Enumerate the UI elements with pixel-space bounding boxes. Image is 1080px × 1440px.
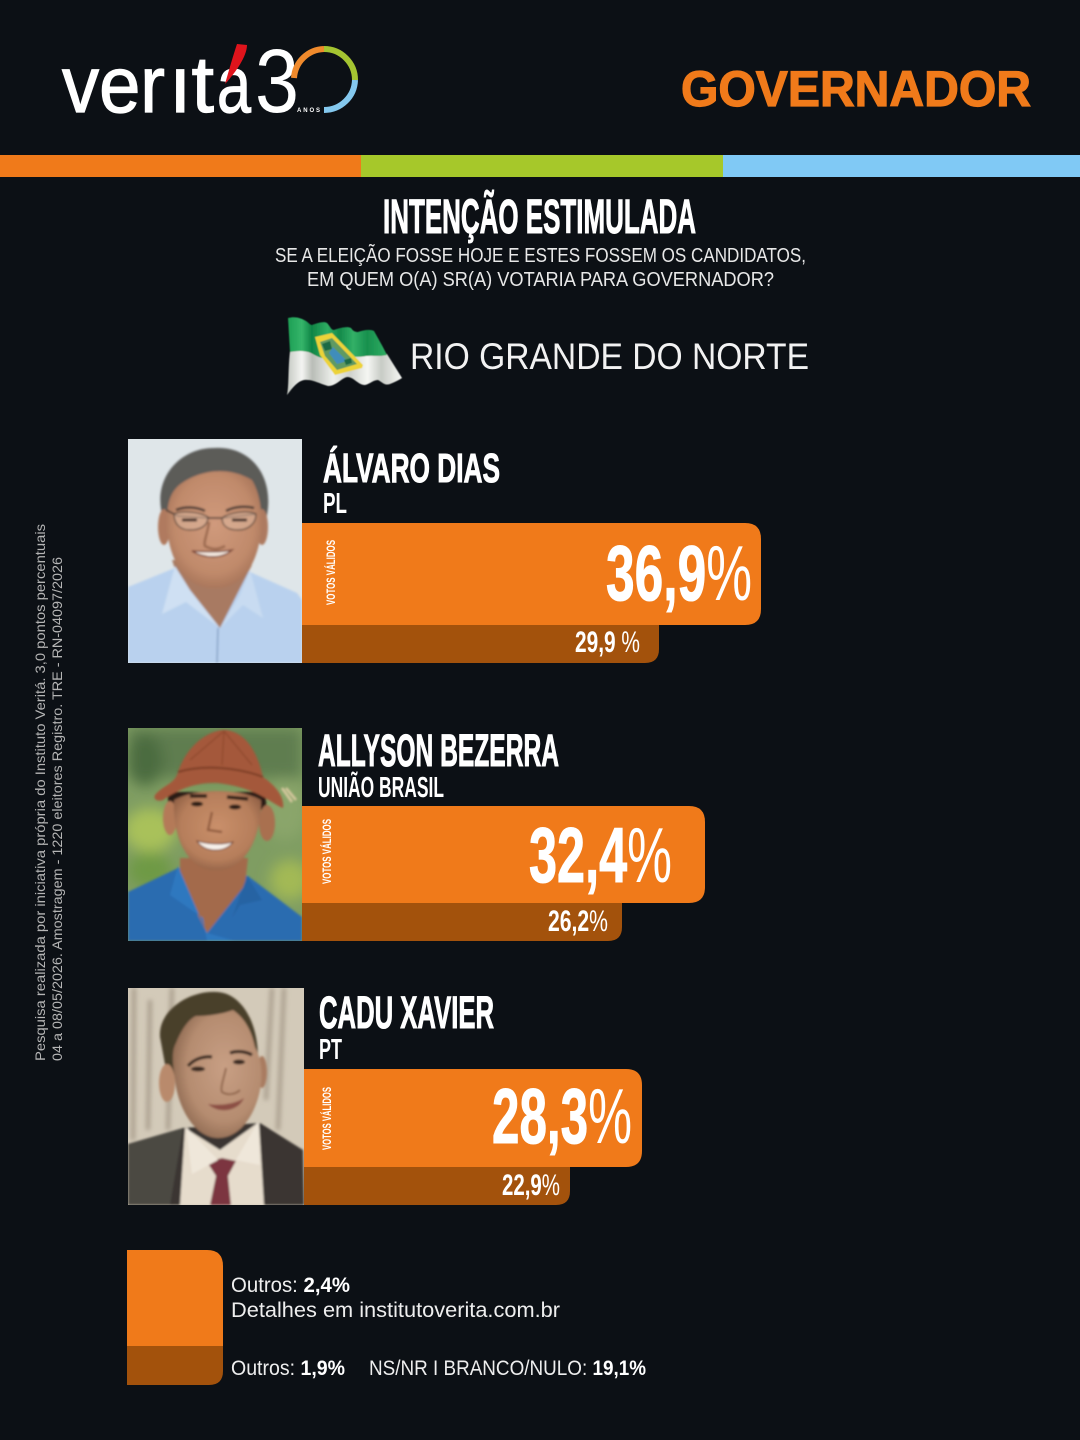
bar: valid votes [302,523,761,625]
value: valid votes: 32,4% [529,811,672,899]
legend text: others total: Outros: 1,9% [231,1357,345,1380]
subtitle question: EM QUEM O(A) SR(A) VOTARIA PARA GOVERNADOR? [307,269,774,291]
panel: candidate Álvaro Dias [128,439,761,663]
candidate name: ALLYSON BEZERRA [318,725,559,776]
bar: total votes [302,903,622,941]
bar: total votes [304,1167,570,1205]
photo: Allyson Bezerra [124,728,310,941]
legend text: details: Detalhes em institutoverita.com.br [231,1299,560,1322]
subtitle question [275,243,806,291]
methodology note: 04 a 08/05/2026. Amostragem - 1220 eleitores Registro. TRE - RN-04097/2026 [49,557,65,1061]
legend swatch: total votes [127,1346,223,1385]
logo: Veritá 30 anos: a [217,40,251,129]
value: total votes: 26,2% [548,905,608,938]
value: valid votes: 36,9% [606,529,752,617]
label: votos válidos: VOTOS VÁLIDOS [319,819,334,884]
value: valid votes: 28,3% [492,1072,632,1160]
value: total votes: 22,9% [502,1169,560,1202]
title: Intenção estimulada: INTENÇÃO ESTIMULADA [383,189,696,244]
candidate name: CADU XAVIER [319,987,494,1038]
legend: others and undecided [127,1250,646,1385]
bar: valid votes [304,1069,642,1167]
candidate name: ÁLVARO DIAS [323,445,500,491]
heading: Governador: GOVERNADOR [681,61,1031,117]
logo: Veritá 30 anos [62,32,355,132]
label: votos válidos: VOTOS VÁLIDOS [323,540,338,605]
party: UNIÃO BRASIL [318,770,444,804]
bar: total votes [302,625,659,663]
logo: Veritá 30 anos: 3 [255,32,299,132]
icon: Rio Grande do Norte flag [287,317,402,395]
colour stripe [0,155,1080,177]
photo: Álvaro Dias [128,439,302,663]
bar: valid votes [302,806,705,903]
photo: Cadu Xavier [128,988,304,1205]
heading: state name: RIO GRANDE DO NORTE [410,336,809,377]
legend swatch: valid votes [127,1250,223,1346]
logo: Veritá 30 anos: ver [62,40,165,129]
value: total votes: 29,9 % [575,626,640,659]
panel: candidate Cadu Xavier [128,987,642,1205]
legend text: undecided and blank: NS/NR I BRANCO/NULO: 19,1% [369,1357,646,1380]
logo: Veritá 30 anos: ıt [169,40,214,129]
party: PL [323,488,347,520]
methodology note [32,524,65,1061]
label: votos válidos: VOTOS VÁLIDOS [319,1087,334,1150]
methodology note: Pesquisa realizada por iniciativa própria do Instituto Veritá. 3,0 pontos percentuais [32,524,48,1061]
logo: Veritá 30 anos: ANOS [297,108,320,114]
panel: candidate Allyson Bezerra [124,725,705,941]
party: PT [319,1034,342,1066]
subtitle question: SE A ELEIÇÃO FOSSE HOJE E ESTES FOSSEM OS CANDIDATOS, [275,243,806,267]
legend text: others valid: Outros: 2,4% [231,1274,350,1297]
